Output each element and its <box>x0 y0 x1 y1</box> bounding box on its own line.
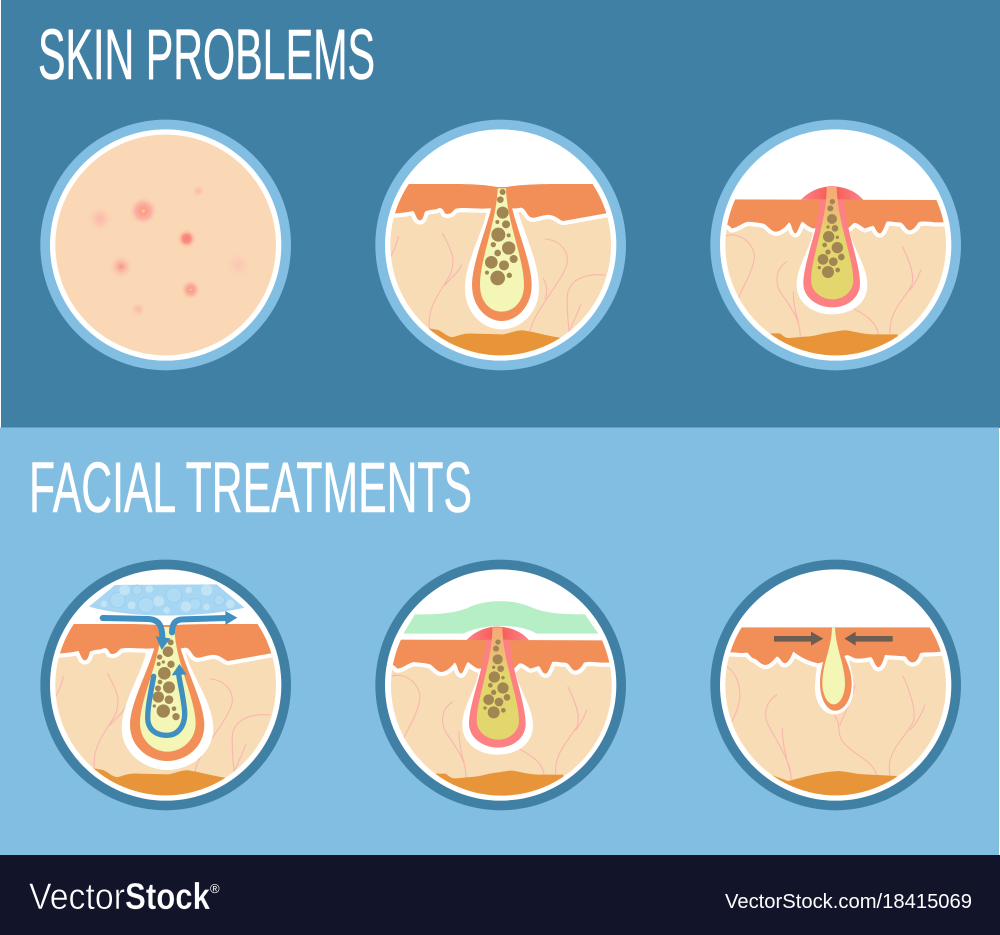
green cream layer <box>403 601 598 634</box>
panel: facial treatments background <box>0 428 999 856</box>
circle: treatment cream on pimple <box>375 560 626 810</box>
sebum dots <box>483 639 510 718</box>
sebum dots <box>818 199 845 278</box>
footer logo: ® <box>210 881 220 896</box>
sebum dots <box>485 189 518 285</box>
circle: cleansing foam treatment <box>40 560 291 810</box>
arrow: pressing left <box>844 632 893 646</box>
arrow: pressing right <box>774 632 823 646</box>
circle: inflamed pimple cross-section <box>710 120 961 370</box>
panel: skin problems background <box>1 0 1000 428</box>
arrow: circulation inside follicle <box>148 664 187 735</box>
footer bar <box>0 855 1000 935</box>
circle: clogged pore cross-section <box>375 120 626 370</box>
heading: skin problems: SKIN PROBLEMS <box>38 16 375 95</box>
foam pad with bubbles <box>89 584 244 616</box>
footer logo: Stock <box>125 876 210 917</box>
circle: tightened pore cross-section <box>710 560 961 810</box>
footer logo <box>29 876 220 917</box>
footer logo: Vector <box>29 876 125 917</box>
footer image id: VectorStock.com/18415069 <box>725 890 972 913</box>
heading: facial treatments: FACIAL TREATMENTS <box>29 449 472 528</box>
circle: skin surface with acne spots <box>40 120 291 370</box>
acne spots <box>87 184 252 317</box>
sebum dots <box>153 639 180 720</box>
arrow: foam flowing into pore <box>103 618 170 650</box>
arrow: flow out of pore <box>172 611 237 632</box>
